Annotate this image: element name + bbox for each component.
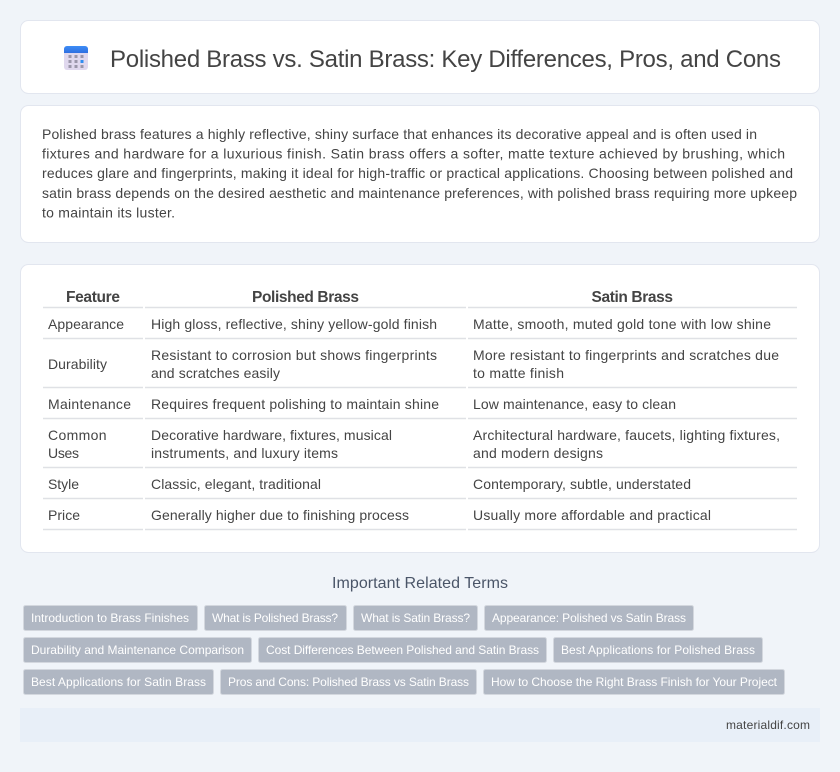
intro text <box>42 126 797 220</box>
table rules <box>43 308 797 530</box>
intro text: Polished brass features a highly reflective, shiny surface that enhances its decorative appeal and is often used in <box>42 126 757 142</box>
row: durability: and scratches easily <box>151 365 280 381</box>
row: common uses: Uses <box>48 445 79 461</box>
row: common uses: Architectural hardware, faucets, lighting fixtures, <box>473 427 780 443</box>
row: common uses: and modern designs <box>473 445 603 461</box>
row: style: Style <box>48 476 79 492</box>
row: common uses: instruments, and luxury items <box>151 445 338 461</box>
row: common uses <box>48 427 780 461</box>
tag <box>554 638 762 662</box>
row: price <box>48 507 711 523</box>
title: Polished Brass vs. Satin Brass: Key Differences, Pros, and Cons <box>110 46 781 73</box>
related term tags <box>24 606 784 694</box>
row: durability: Durability <box>48 356 107 372</box>
footer: materialdif.com <box>726 718 810 732</box>
footer <box>20 708 820 742</box>
row: maintenance: Requires frequent polishing to maintain shine <box>151 396 439 412</box>
intro text: fixtures and hardware for a luxurious finish. Satin brass offers a softer, matte texture achieved by brushing, which <box>42 146 785 162</box>
row: durability: to matte finish <box>473 365 564 381</box>
panel: comparison table <box>20 264 820 552</box>
row: appearance: Matte, smooth, muted gold tone with low shine <box>473 316 771 332</box>
tag <box>258 638 546 662</box>
tag: Cost Differences Between Polished and Satin Brass <box>266 643 539 657</box>
tag <box>484 670 784 694</box>
row: durability <box>48 347 779 381</box>
row: maintenance: Low maintenance, easy to clean <box>473 396 676 412</box>
row: style: Contemporary, subtle, understated <box>473 476 691 492</box>
row: price: Price <box>48 507 80 523</box>
tag <box>24 638 252 662</box>
table header: Polished Brass <box>252 289 359 306</box>
tag <box>204 606 346 630</box>
tag <box>24 670 214 694</box>
intro text: reduces glare and fingerprints, making it ideal for high-traffic or practical applications. Choosing between polished and <box>42 165 793 181</box>
row: style: Classic, elegant, traditional <box>151 476 321 492</box>
tag: Best Applications for Polished Brass <box>561 643 755 657</box>
row: appearance: High gloss, reflective, shiny yellow-gold finish <box>151 316 437 332</box>
table header: Feature <box>66 289 120 306</box>
intro text: satin brass depends on the desired aesthetic and maintenance preferences, with polished brass requiring more upkeep <box>42 185 797 201</box>
row: maintenance: Maintenance <box>48 396 131 412</box>
panel: title header <box>20 20 820 94</box>
tag: Pros and Cons: Polished Brass vs Satin Brass <box>228 675 469 689</box>
icon: calendar <box>64 46 88 70</box>
row: durability: Resistant to corrosion but shows fingerprints <box>151 347 437 363</box>
row: style <box>48 476 691 492</box>
tag: Best Applications for Satin Brass <box>31 675 206 689</box>
row: common uses: Common <box>48 427 106 443</box>
tag <box>354 606 478 630</box>
row: common uses: Decorative hardware, fixtures, musical <box>151 427 392 443</box>
row: maintenance <box>48 396 676 412</box>
intro text: to maintain its luster. <box>42 204 175 220</box>
row: durability: More resistant to fingerprints and scratches due <box>473 347 779 363</box>
tag: How to Choose the Right Brass Finish for Your Project <box>491 675 778 689</box>
tag: What is Satin Brass? <box>361 611 470 625</box>
tag: What is Polished Brass? <box>212 611 338 625</box>
row: price: Generally higher due to finishing process <box>151 507 409 523</box>
tag: Durability and Maintenance Comparison <box>31 643 244 657</box>
tag: Appearance: Polished vs Satin Brass <box>492 611 686 625</box>
tag <box>484 606 694 630</box>
panel: introduction <box>20 106 820 242</box>
table header: Satin Brass <box>592 289 673 306</box>
row: appearance: Appearance <box>48 316 124 332</box>
heading: important related terms: Important Related Terms <box>332 575 508 592</box>
tag: Introduction to Brass Finishes <box>31 611 189 625</box>
table header <box>66 289 673 306</box>
row: price: Usually more affordable and practical <box>473 507 711 523</box>
row: appearance <box>48 316 771 332</box>
tag <box>220 670 476 694</box>
tag <box>24 606 198 630</box>
